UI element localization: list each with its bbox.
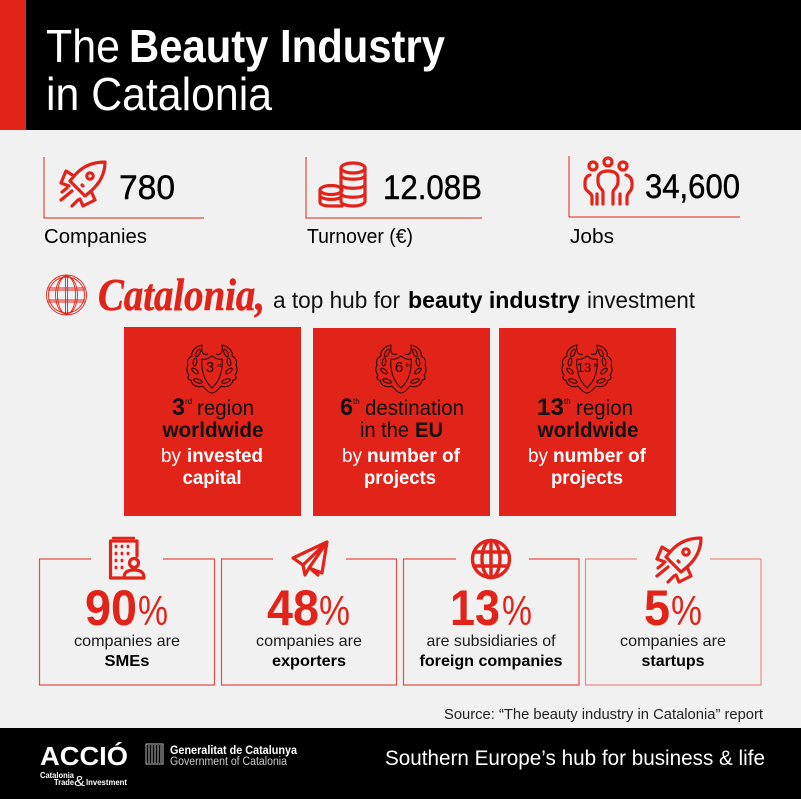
icon: globe (472, 540, 510, 578)
icon: laurel 6th (376, 345, 426, 393)
panel: 6th destination in the EU: 6 (340, 394, 353, 421)
logo: Generalitat de Catalunya: Generalitat de Catalunya (170, 745, 298, 757)
panel: 6th destination in the EU: by (342, 445, 362, 467)
panel: 3rd region worldwide: region (197, 396, 254, 420)
panel: 6th destination in the EU: th (353, 397, 360, 406)
heading: Catalonia top hub: Catalonia, (98, 269, 265, 320)
title: in Catalonia (46, 68, 272, 120)
panel: SMEs: 90 (85, 580, 137, 636)
logo: Generalitat de Catalunya: Government of Catalonia (170, 756, 288, 768)
stat: companies: 780 (119, 169, 175, 207)
panel: 13th region worldwide: projects (551, 467, 623, 489)
header banner (0, 0, 801, 130)
footer (0, 728, 801, 799)
tagline: Southern Europe’s hub for business & life (385, 747, 765, 770)
logo: ACCIÓ: ACCIÓ (40, 741, 128, 771)
panel: 6th destination in the EU: number of (367, 445, 460, 467)
heading: Catalonia top hub: beauty industry (408, 287, 580, 313)
panel: exporters (222, 542, 396, 685)
panel: SMEs (40, 538, 214, 685)
panel: 13th region worldwide (499, 328, 676, 516)
source note: Source: “The beauty industry in Catalonia” report (444, 707, 763, 723)
icon: rocket (61, 162, 105, 206)
panel: 3rd region worldwide: capital (182, 467, 242, 489)
icon: laurel 3rd: 3 (206, 359, 214, 376)
panel: 13th region worldwide: th (564, 397, 571, 406)
stat: jobs (569, 156, 740, 248)
panel: exporters: exporters (272, 653, 346, 670)
panel: 3rd region worldwide (124, 327, 301, 516)
stat: turnover: Turnover (€) (307, 226, 413, 248)
icon: people (585, 158, 632, 204)
panel: 6th destination in the EU (313, 328, 490, 516)
logo: Generalitat de Catalunya (146, 744, 298, 768)
panel: 13th region worldwide: worldwide (537, 418, 639, 442)
panel: 13th region worldwide: number of (553, 445, 646, 467)
icon: shield (146, 744, 163, 764)
icon: paper plane (293, 542, 327, 575)
heading: Catalonia top hub (46, 269, 696, 320)
logo: ACCIÓ: Investment (86, 778, 127, 787)
icon: rocket (657, 538, 701, 582)
panel: startups (586, 538, 761, 685)
stat: jobs: 34,600 (645, 168, 740, 206)
panel: 3rd region worldwide: 3 (172, 394, 185, 421)
panel: 6th destination in the EU: projects (364, 467, 436, 489)
panel: 3rd region worldwide: by (161, 445, 181, 467)
panel: startups: companies are (620, 633, 726, 650)
icon: laurel 6th: 6 (395, 359, 403, 376)
icon: laurel 13th (562, 345, 612, 393)
panel: startups: startups (642, 653, 705, 670)
icon: laurel 6th: th (406, 363, 410, 369)
panel: 6th destination in the EU: EU (415, 418, 443, 442)
panel: SMEs: SMEs (104, 653, 150, 670)
stat: companies: Companies (44, 226, 147, 248)
panel: exporters: companies are (256, 633, 362, 650)
title: The (46, 20, 120, 72)
icon: coins (320, 163, 365, 206)
stat: jobs: Jobs (570, 226, 614, 248)
panel: subsidiaries (404, 540, 579, 685)
panel: exporters: 48 (267, 580, 319, 636)
stat: turnover: 12.08B (383, 169, 482, 207)
panel: startups: 5 (644, 580, 670, 636)
panel: exporters: % (319, 587, 350, 634)
panel: subsidiaries: % (502, 587, 532, 634)
panel: 3rd region worldwide: invested (187, 445, 263, 467)
panel: 13th region worldwide: by (528, 445, 548, 467)
panel: subsidiaries: foreign companies (420, 653, 563, 670)
panel: subsidiaries: are subsidiaries of (426, 633, 556, 650)
title: Beauty Industry (129, 20, 445, 72)
panel: 6th destination in the EU: destination (365, 396, 464, 420)
icon: laurel 3rd (187, 345, 237, 393)
heading: Catalonia top hub: a top hub for (273, 287, 400, 313)
stat: companies (44, 157, 204, 248)
icon: laurel 13th: th (594, 363, 598, 369)
panel: 13th region worldwide: region (576, 396, 633, 420)
logo: ACCIÓ: & (74, 773, 85, 790)
logo: ACCIÓ: Trade (54, 778, 75, 787)
panel: 13th region worldwide: 13 (537, 394, 564, 421)
panel: 6th destination in the EU: in the (360, 418, 409, 442)
panel: SMEs: % (138, 587, 168, 634)
icon: laurel 3rd: rd (217, 363, 221, 369)
icon: building with person (110, 538, 144, 578)
icon: outlined globe (46, 275, 86, 315)
panel: 3rd region worldwide: rd (185, 397, 192, 406)
icon: laurel 13th: 13 (577, 360, 591, 375)
panel: subsidiaries: 13 (450, 580, 500, 636)
panel: 3rd region worldwide: worldwide (162, 418, 264, 442)
heading: Catalonia top hub: investment (587, 287, 696, 313)
logo: ACCIÓ (40, 741, 128, 790)
stat: turnover (306, 157, 482, 248)
panel: SMEs: companies are (74, 633, 180, 650)
title (46, 20, 445, 120)
logo: ACCIÓ: Catalonia (40, 771, 75, 780)
panel: startups: % (671, 587, 702, 634)
